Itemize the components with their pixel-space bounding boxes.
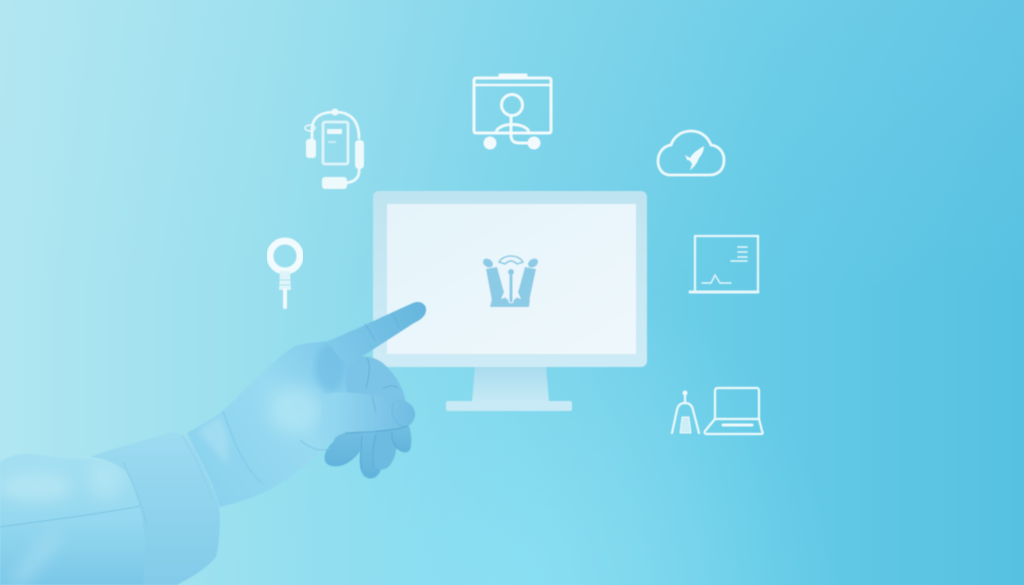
icon: headset with phone: [305, 108, 364, 189]
screen emblem: [481, 256, 540, 307]
icon: laptop with chart: [690, 236, 758, 292]
monitor screen: [387, 204, 636, 354]
curled fingers: [324, 356, 411, 479]
index finger: [328, 302, 426, 365]
sleeve: [0, 454, 160, 585]
icon: bell-shaped tool and laptop: [672, 388, 763, 434]
icon: ring key: [270, 241, 300, 309]
pressing finger: [318, 393, 415, 437]
arm and hand: [0, 302, 426, 585]
glove: [187, 302, 426, 507]
palm and wrist: [187, 340, 350, 507]
monitor stand: [446, 366, 572, 411]
monitor bezel: [373, 191, 647, 367]
monitor: [373, 191, 647, 411]
icon: video call with stethoscope: [474, 75, 551, 150]
icon: cloud with rocket: [658, 131, 724, 175]
cuff: [90, 432, 220, 585]
